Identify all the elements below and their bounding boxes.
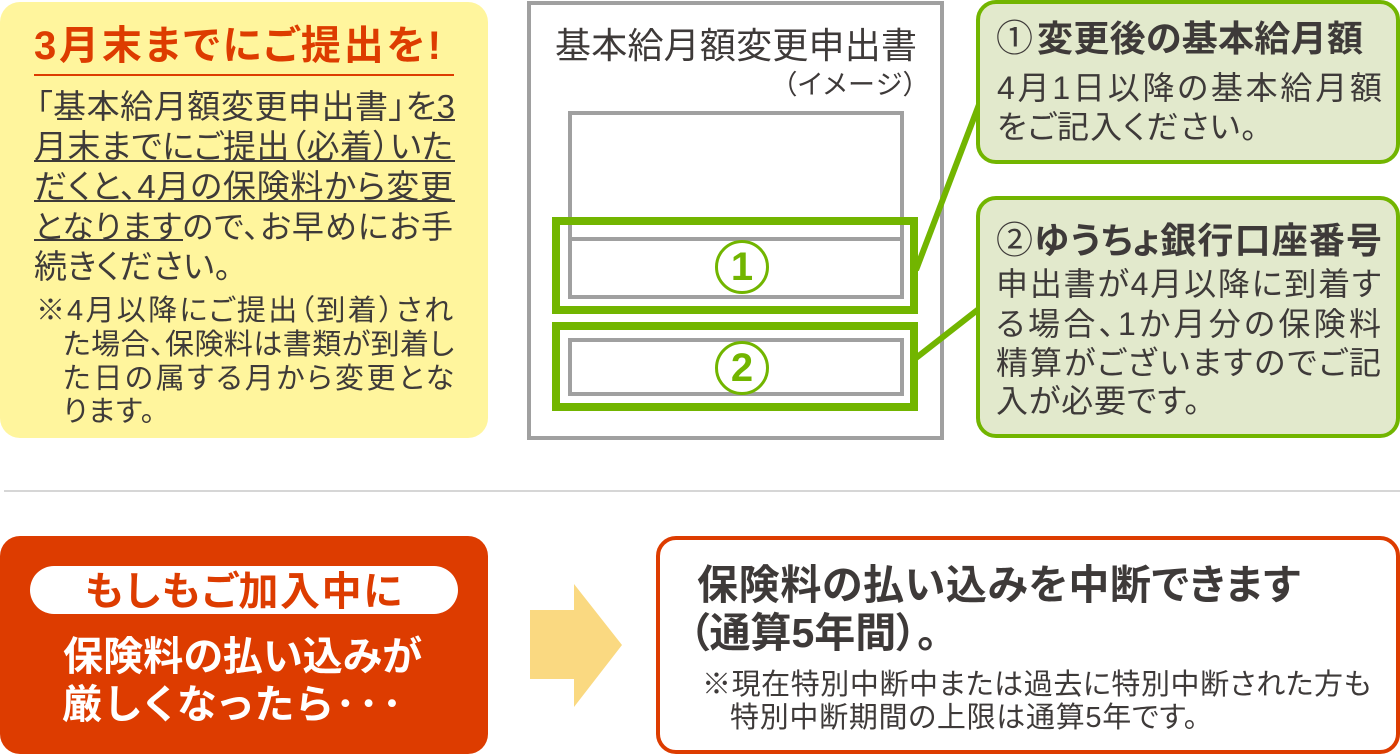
panel: form image (527, 1, 944, 440)
arrow (530, 584, 622, 707)
marker 1: 1 (731, 245, 753, 289)
callout 1 body: をご記入ください。 (997, 109, 1257, 145)
highlight 1 (552, 217, 918, 314)
panel: deadline notice (0, 2, 488, 438)
panel: result (656, 536, 1400, 754)
form box: lower (568, 338, 904, 396)
text block: deadline note: ります。 (63, 396, 155, 428)
callout 1 body: 4月1日以降の基本給月額 (997, 70, 1382, 106)
callout 1 heading: 変更後の基本給月額 (1037, 18, 1363, 59)
callout 2 body: 申出書が4月以降に到着す (996, 266, 1381, 302)
form title: 基本給月額変更申出書 (555, 25, 917, 66)
text block: deadline body: 続きください。 (34, 248, 231, 285)
callout 2 body: 入が必要です。 (996, 383, 1200, 419)
marker 1 (715, 240, 769, 294)
panel text (62, 635, 422, 727)
form divider (568, 237, 904, 241)
text block: deadline body: だくと、4月の保険料から変更 (34, 168, 453, 205)
result heading: （通算5年間）。 (689, 610, 937, 656)
heading: deadline: 3月末までにご提出を! (34, 24, 441, 68)
callout 2 heading: ゆうちょ銀行口座番号 (1034, 220, 1382, 261)
connector lines (918, 104, 976, 360)
pill label: もしもご加入中に (85, 570, 402, 614)
text block: deadline note: 4月以降にご提出（到着）され (67, 295, 453, 327)
result note (702, 669, 1371, 734)
text block: deadline body: となりますので、お早めにお手 (34, 209, 453, 245)
result heading (689, 562, 1300, 656)
text block: deadline note (36, 295, 454, 428)
panel: if payment is hard (0, 536, 488, 754)
callout 2 body: 精算がございますのでご記 (996, 345, 1381, 381)
text block: deadline note: た場合、保険料は書類が到着し (63, 329, 454, 361)
text block: deadline body: 月末までにご提出（必着）いた (34, 128, 453, 165)
callout 1 body (997, 70, 1382, 145)
text block: deadline note: た日の属する月から変更とな (63, 363, 454, 395)
result note: 特別中断期間の上限は通算5年です。 (730, 702, 1198, 734)
panel: callout 2 (976, 196, 1400, 438)
pill label (30, 566, 458, 614)
callout 1 heading: ① (996, 18, 1033, 59)
text block: deadline body: 「基本給月額変更申出書」を3 (36, 88, 455, 125)
panel text: 保険料の払い込みが (63, 635, 422, 679)
form subtitle: （イメージ） (783, 70, 917, 100)
callout 2 body (996, 266, 1381, 419)
panel: callout 1 (976, 0, 1400, 164)
marker 2 (715, 341, 769, 395)
callout 2 heading: ② (996, 220, 1033, 261)
form box: upper (568, 111, 904, 299)
text block: deadline body (34, 88, 455, 285)
text block: deadline note: ※ (36, 295, 65, 327)
marker 2: 2 (731, 346, 753, 390)
panel text: 厳しくなったら･･･ (62, 683, 402, 727)
callout 2 body: る場合、1か月分の保険料 (996, 306, 1381, 342)
result heading: 保険料の払い込みを中断できます (697, 562, 1300, 608)
highlight 2 (552, 322, 918, 411)
result note: ※現在特別中断中または過去に特別中断された方も (702, 669, 1371, 701)
